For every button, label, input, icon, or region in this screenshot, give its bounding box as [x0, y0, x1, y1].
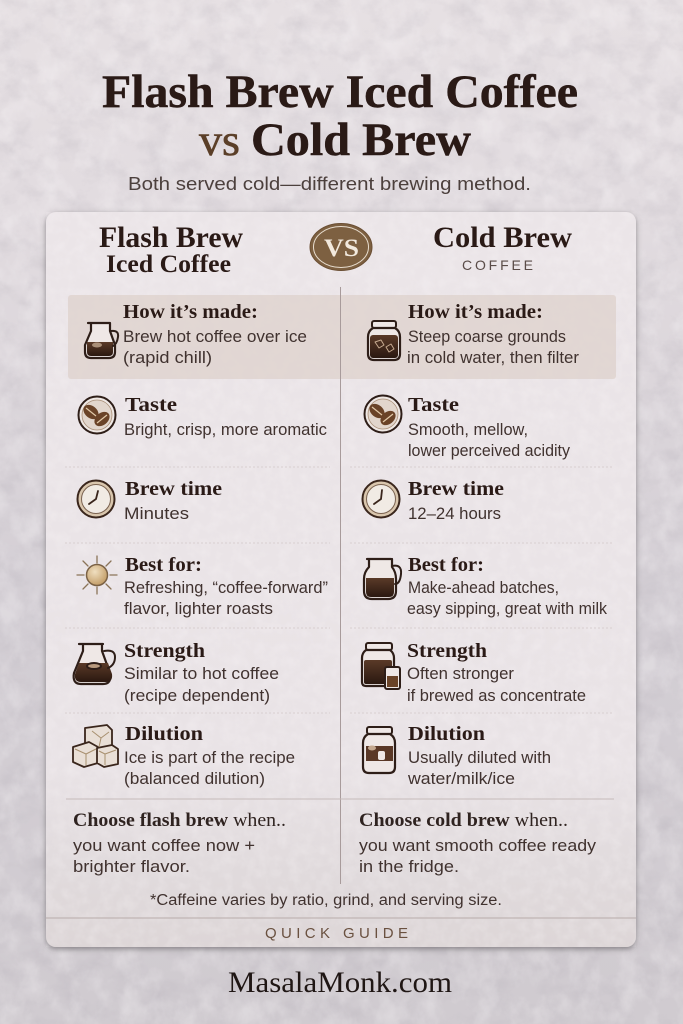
- title: Cold Brew: [251, 114, 471, 166]
- icon: clock: [78, 480, 114, 518]
- left column heading: Flash Brew: [99, 221, 243, 254]
- row: dilution, flash brew: Ice is part of the recipe: [124, 749, 295, 767]
- right column heading: [433, 221, 572, 273]
- row: strength, cold brew: Often stronger: [407, 665, 514, 683]
- row: brew time, flash brew: [78, 478, 222, 523]
- row: brew time, cold brew: Brew time: [408, 478, 504, 500]
- icon: jar with ice and milk: [363, 727, 395, 773]
- row: taste, flash brew: Bright, crisp, more aromatic: [124, 421, 327, 439]
- icon: jar of cold brew: [368, 321, 400, 360]
- icon: clock: [362, 480, 400, 518]
- highlight band: how it's made: [68, 295, 616, 379]
- row: dilution, flash brew: [73, 723, 295, 788]
- choose flash brew: you want coffee now +: [73, 837, 255, 855]
- row: how it's made, flash brew: (rapid chill): [123, 349, 212, 367]
- choose cold brew: in the fridge.: [359, 858, 459, 876]
- choose cold brew: [359, 810, 597, 876]
- choose cold brew: Choose cold brew when..: [359, 810, 568, 831]
- row: taste, cold brew: Taste: [408, 394, 459, 416]
- icon: coffee beans: [364, 396, 402, 432]
- icon: pitcher: [364, 559, 401, 599]
- row: strength, flash brew: Similar to hot coffee: [124, 665, 279, 683]
- row: dilution, flash brew: Dilution: [125, 723, 204, 745]
- row: best for, cold brew: Make-ahead batches,: [408, 579, 559, 597]
- right column heading: Cold Brew: [433, 221, 572, 254]
- row: brew time, flash brew: Brew time: [125, 478, 222, 500]
- row: strength, flash brew: (recipe dependent): [124, 687, 270, 705]
- row: brew time, cold brew: [362, 478, 504, 523]
- row: dilution, cold brew: [363, 723, 551, 788]
- vs badge: [310, 224, 372, 270]
- icon: carafe with ice: [85, 323, 118, 358]
- row: best for, flash brew: Refreshing, “coffee-forward”: [124, 579, 328, 597]
- row: how it's made, flash brew: [85, 301, 307, 367]
- row: brew time, cold brew: 12–24 hours: [408, 505, 501, 523]
- row: strength, flash brew: Strength: [124, 640, 206, 662]
- row: brew time, flash brew: Minutes: [124, 505, 189, 523]
- row: taste, flash brew: [78, 394, 327, 439]
- row: best for, cold brew: easy sipping, great with milk: [407, 600, 608, 618]
- row: taste, cold brew: Smooth, mellow,: [408, 421, 528, 439]
- icon: jar and glass: [362, 643, 400, 689]
- row: best for, flash brew: [77, 554, 328, 618]
- row: how it's made, cold brew: Steep coarse grounds: [408, 328, 566, 346]
- row: how it's made, cold brew: in cold water, then filter: [407, 349, 580, 367]
- icon: ice cubes: [73, 725, 118, 767]
- row: strength, cold brew: Strength: [407, 640, 488, 662]
- vs badge: VS: [324, 235, 359, 262]
- row: how it's made, cold brew: [368, 301, 580, 367]
- left column heading: [99, 221, 243, 278]
- row: taste, cold brew: [364, 394, 571, 460]
- comparison card: [46, 212, 636, 947]
- icon: coffee beans: [78, 396, 116, 434]
- choose flash brew: [73, 810, 286, 876]
- row: how it's made, cold brew: How it’s made:: [408, 301, 543, 323]
- row: strength, cold brew: [362, 640, 586, 705]
- caffeine footnote: *Caffeine varies by ratio, grind, and serving size.: [150, 892, 502, 909]
- row: dilution, cold brew: water/milk/ice: [407, 770, 515, 788]
- website footer: MasalaMonk.com: [228, 966, 452, 999]
- row: taste, flash brew: Taste: [125, 394, 177, 416]
- icon: sun: [77, 556, 117, 594]
- right column heading: COFFEE: [462, 257, 533, 273]
- icon: carafe: [74, 644, 115, 684]
- row: best for, flash brew: flavor, lighter roasts: [124, 600, 273, 618]
- choose flash brew: Choose flash brew when..: [73, 810, 286, 831]
- row: how it's made, flash brew: Brew hot coffee over ice: [123, 328, 307, 346]
- row: strength, flash brew: [74, 640, 279, 705]
- row: dilution, cold brew: Usually diluted with: [408, 749, 551, 767]
- title: Flash Brew Iced Coffee: [102, 66, 578, 118]
- quick guide label: QUICK GUIDE: [265, 925, 408, 942]
- choose flash brew: brighter flavor.: [73, 858, 190, 876]
- row: how it's made, flash brew: How it’s made:: [123, 301, 258, 323]
- row: best for, cold brew: [364, 554, 608, 618]
- row: best for, cold brew: Best for:: [408, 554, 484, 576]
- choose cold brew: you want smooth coffee ready: [359, 837, 597, 855]
- left column heading: Iced Coffee: [106, 251, 231, 278]
- subtitle: Both served cold—different brewing method.: [128, 173, 531, 194]
- row: dilution, cold brew: Dilution: [408, 723, 486, 745]
- row: strength, cold brew: if brewed as concentrate: [407, 687, 586, 705]
- row: taste, cold brew: lower perceived acidity: [408, 442, 571, 460]
- row: dilution, flash brew: (balanced dilution): [124, 770, 265, 788]
- title: [102, 66, 578, 166]
- title: vs: [199, 116, 240, 165]
- row: best for, flash brew: Best for:: [125, 554, 202, 576]
